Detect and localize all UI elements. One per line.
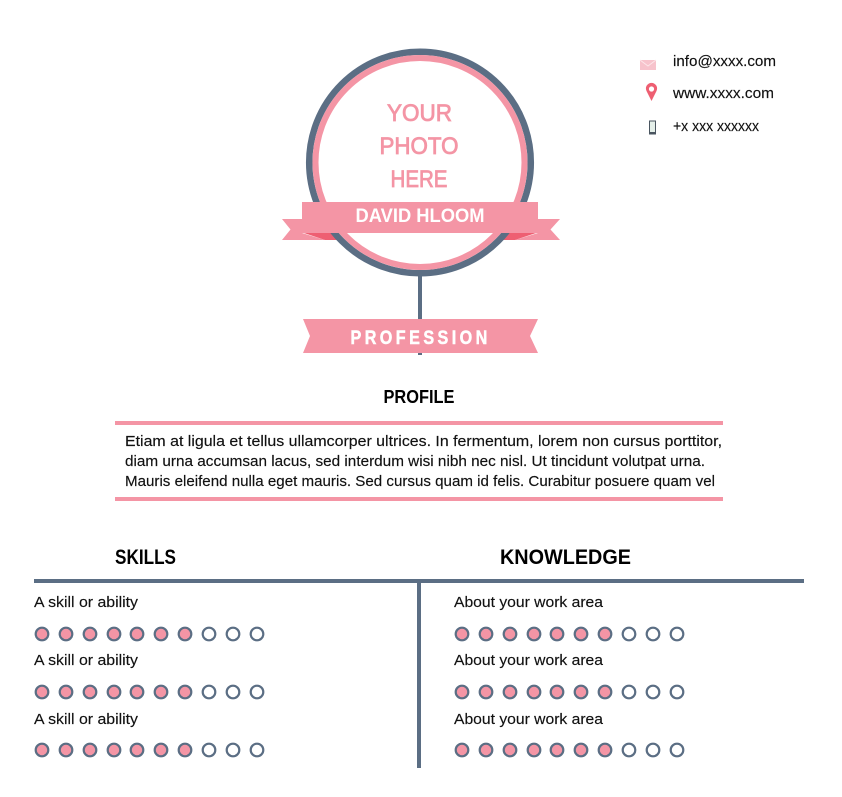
name: DAVID HLOOM: [356, 205, 484, 227]
icon: envelope: [640, 60, 656, 70]
knowledge column: [454, 594, 683, 756]
outer ring: [309, 52, 531, 273]
profession text: PROFESSION: [350, 327, 487, 348]
skill rating dots: [36, 628, 263, 756]
skills column: [34, 594, 263, 756]
profession ribbon: [303, 319, 538, 353]
profile text block: diam urna accumsan lacus, sed interdum wisi nibh nec nisl. Ut tincidunt volutpat urna.: [125, 453, 705, 470]
photo badge: [309, 52, 531, 273]
profile text block: [115, 421, 723, 501]
email: info@xxxx.com: [673, 53, 776, 70]
knowledge column: About your work area: [454, 652, 604, 669]
photo placeholder text: HERE: [390, 166, 448, 193]
left ribbon tail: [282, 219, 325, 240]
photo placeholder text: PHOTO: [380, 133, 458, 160]
phone number: +x xxx xxxxxx: [673, 118, 759, 135]
profile text block: Mauris eleifend nulla eget mauris. Sed cursus quam id felis. Curabitur posuere quam vel: [125, 473, 715, 490]
left ribbon fold: [304, 233, 345, 240]
skills column: A skill or ability: [34, 652, 139, 669]
knowledge rating dots: [456, 628, 683, 756]
skills heading: SKILLS: [115, 546, 176, 569]
knowledge heading: KNOWLEDGE: [500, 546, 631, 569]
icon: location pin: [646, 83, 657, 101]
table rules: [34, 579, 804, 768]
website: www.xxxx.com: [672, 85, 774, 102]
photo placeholder text: YOUR: [387, 100, 452, 127]
knowledge column: About your work area: [454, 711, 604, 728]
icon: phone: [649, 121, 656, 134]
contact block: [640, 53, 776, 135]
photo placeholder text: [380, 100, 458, 193]
skills column: A skill or ability: [34, 711, 139, 728]
profile heading: PROFILE: [384, 387, 454, 407]
name ribbon: [302, 202, 538, 233]
knowledge column: About your work area: [454, 594, 604, 611]
ribbon body: [302, 202, 538, 233]
inner ring: [316, 58, 524, 267]
right ribbon fold: [495, 233, 536, 240]
skills column: A skill or ability: [34, 594, 139, 611]
right ribbon tail: [515, 219, 560, 240]
vertical stem connecting photo and profession: [418, 274, 422, 355]
profile text block: Etiam at ligula et tellus ullamcorper ultrices. In fermentum, lorem non cursus porttitor,: [125, 433, 722, 450]
